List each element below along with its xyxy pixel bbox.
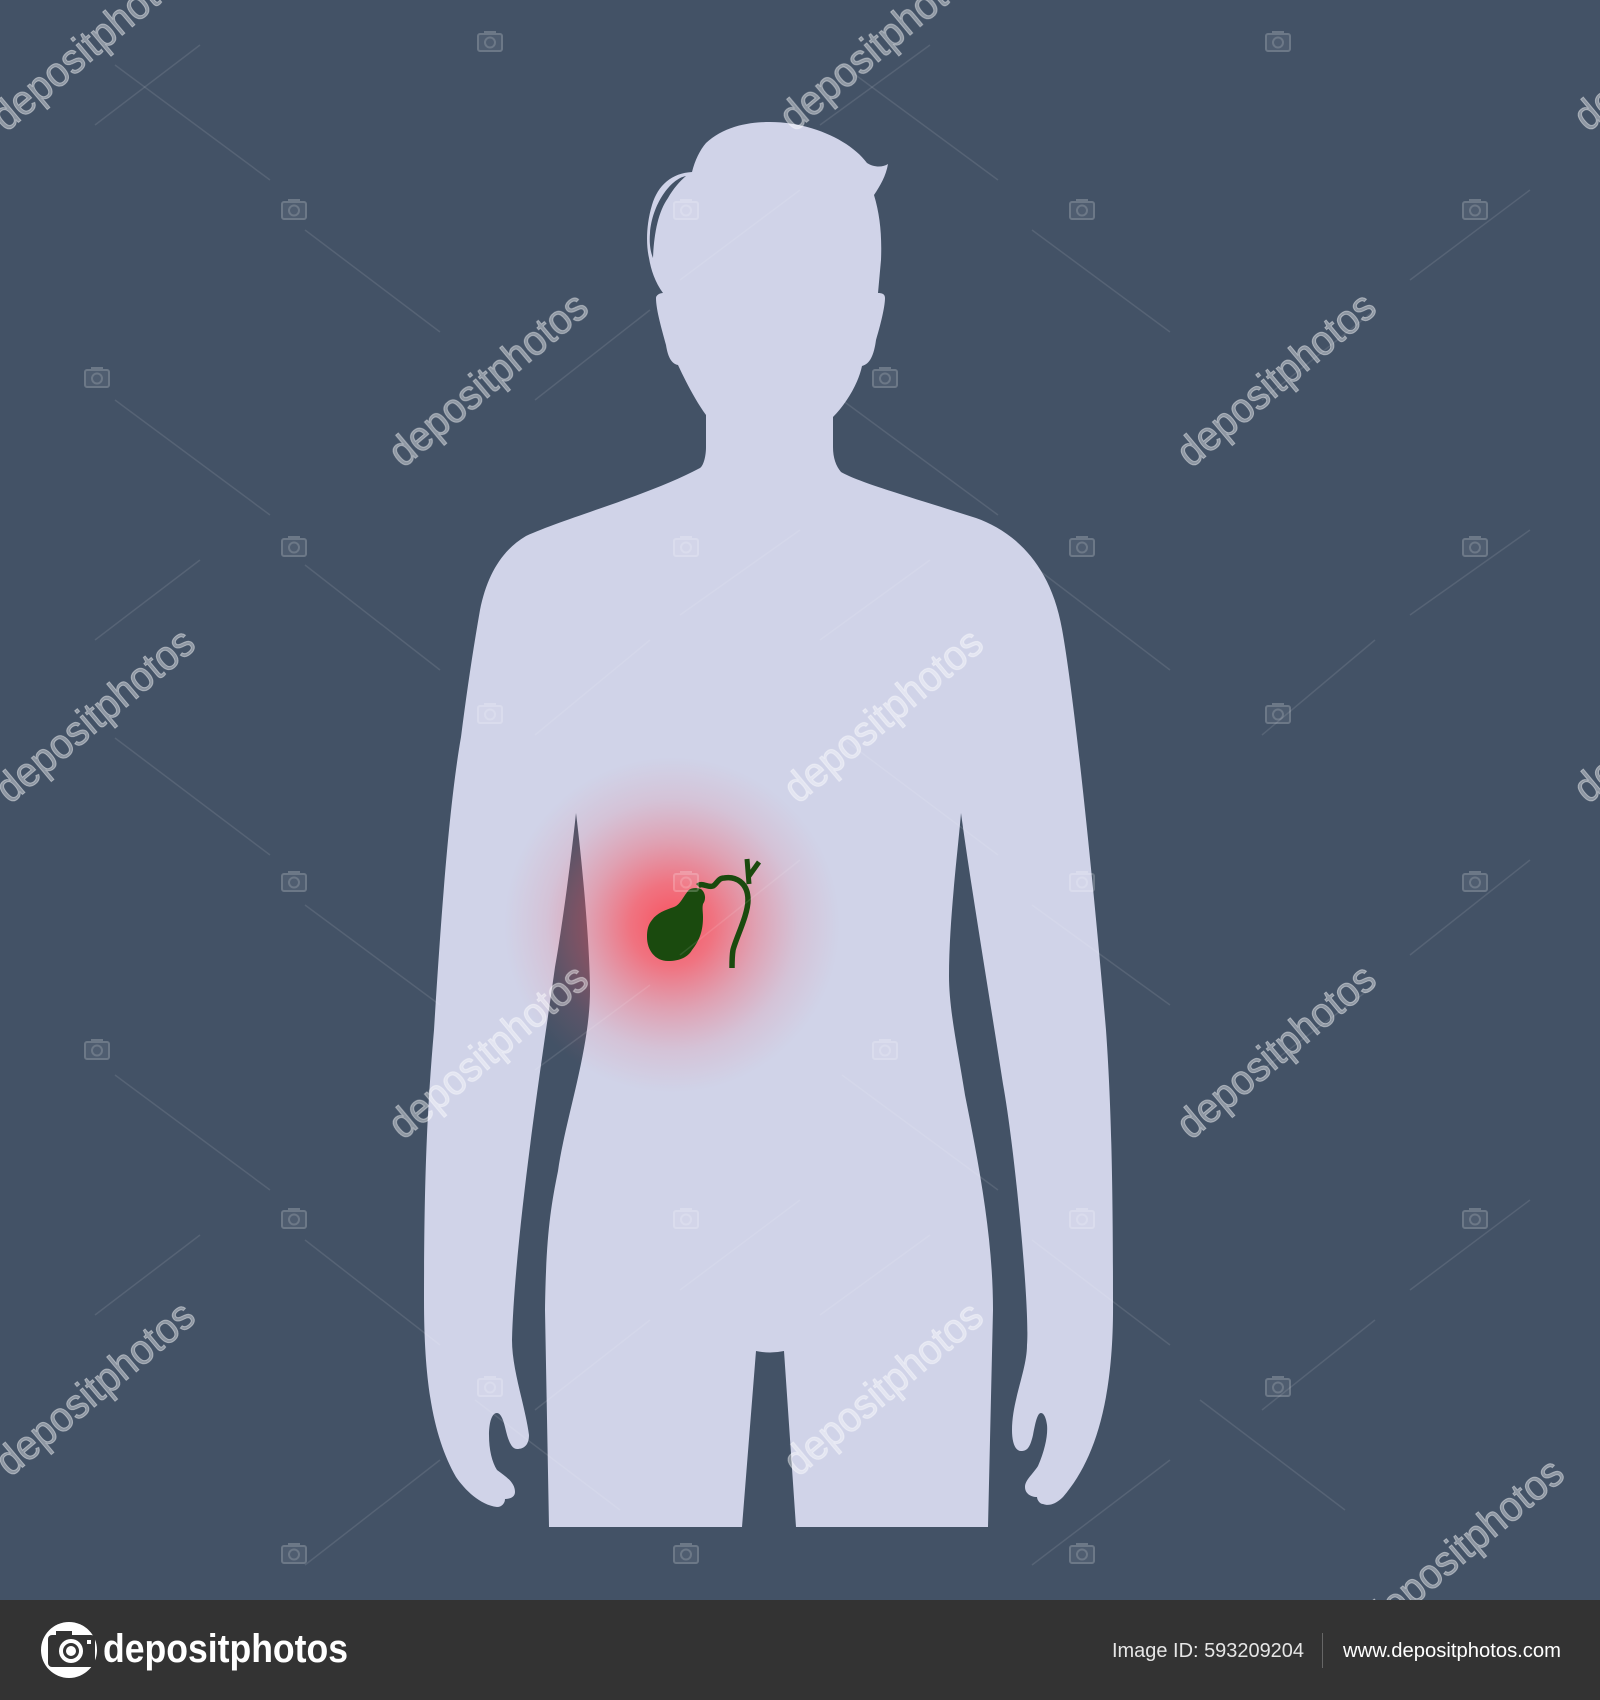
- pain glow: [504, 757, 840, 1093]
- icon: depositphotos logo: [41, 1622, 97, 1678]
- image id: Image ID: 593209204: [1112, 1640, 1304, 1662]
- footer bar: [0, 1600, 1600, 1700]
- watermark text: depositphotos: [1167, 282, 1385, 476]
- body silhouette: [424, 122, 1113, 1527]
- website url: www.depositphotos.com: [1342, 1640, 1561, 1662]
- watermark text: depositphotos: [379, 954, 597, 1148]
- brand name: depositphotos: [103, 1627, 348, 1671]
- watermark camera icons: [85, 31, 1487, 1563]
- watermark text: depositphotos: [379, 282, 597, 476]
- watermark text: depositphotos: [774, 618, 992, 812]
- watermark text: depositphotos: [1167, 954, 1385, 1148]
- watermark text: depositphotos: [774, 1291, 992, 1485]
- watermark text: depositphotos: [1355, 1448, 1573, 1642]
- icon: gallbladder and bile duct: [647, 859, 759, 968]
